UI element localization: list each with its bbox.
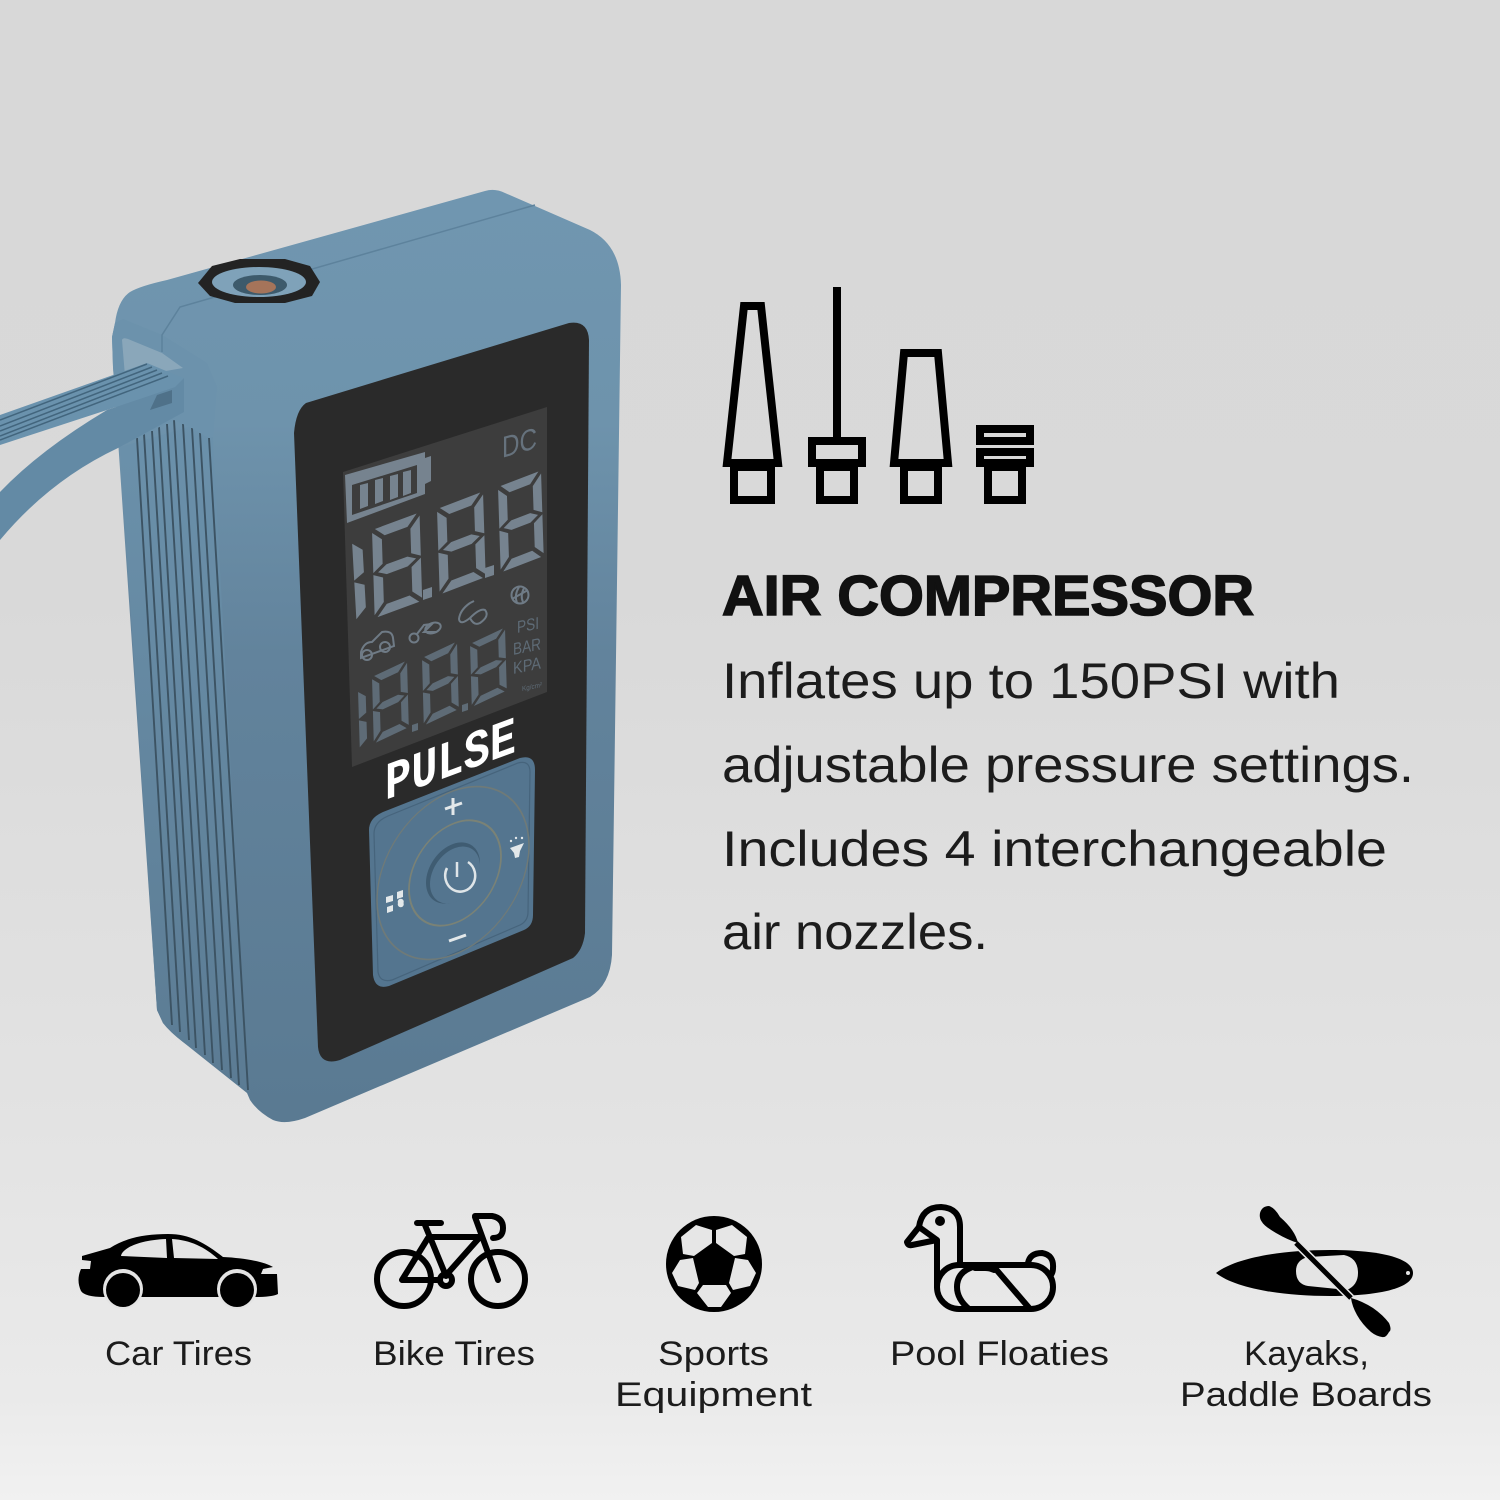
unit labels: Kg/cm² bbox=[522, 682, 543, 693]
ribbed side face bbox=[120, 420, 248, 1090]
icon: duck float bbox=[907, 1207, 1053, 1309]
label: Pool Floaties bbox=[890, 1335, 1109, 1373]
label: Sports bbox=[658, 1335, 769, 1373]
icon: soccer ball bbox=[666, 1216, 762, 1312]
use case: car tires bbox=[78, 1234, 278, 1373]
control pad bbox=[369, 757, 535, 987]
battery indicator bbox=[345, 452, 431, 523]
power button bbox=[426, 834, 480, 912]
seam lines bbox=[162, 205, 535, 352]
small digit readout bbox=[358, 628, 507, 747]
use case: sports equipment bbox=[615, 1216, 813, 1414]
unit labels bbox=[513, 613, 543, 693]
flashlight icon bbox=[510, 837, 524, 858]
mode icons bbox=[361, 586, 528, 660]
nozzle 3 bbox=[894, 353, 948, 500]
minus icon bbox=[449, 935, 466, 941]
nozzle 2: needle bbox=[812, 287, 862, 500]
unit labels: PSI bbox=[517, 613, 539, 637]
unit labels: BAR bbox=[513, 634, 541, 659]
LCD display bbox=[343, 407, 547, 767]
icon: bicycle bbox=[377, 1216, 525, 1306]
use case: kayaks and paddle boards bbox=[1180, 1206, 1432, 1414]
icon: car bbox=[78, 1234, 278, 1309]
strap slot and rim bbox=[112, 319, 217, 447]
description text: Includes 4 interchangeable bbox=[722, 821, 1387, 877]
plus icon bbox=[445, 798, 462, 815]
DC label: DC bbox=[502, 421, 537, 465]
PULSE logo: PULSE bbox=[385, 708, 516, 816]
product: air compressor device bbox=[0, 190, 621, 1122]
use case: bike tires bbox=[373, 1216, 535, 1373]
description text: Inflates up to 150PSI with bbox=[722, 653, 1340, 709]
description text bbox=[722, 653, 1414, 960]
mode dots icon bbox=[386, 890, 404, 913]
nozzle 4 bbox=[980, 429, 1030, 500]
nozzle 1 bbox=[727, 306, 778, 500]
heading: AIR COMPRESSOR bbox=[722, 564, 1254, 628]
icon: kayak and paddle bbox=[1216, 1206, 1413, 1337]
air outlet port bbox=[198, 259, 320, 303]
label line 2: Equipment bbox=[615, 1376, 813, 1414]
description text: air nozzles. bbox=[722, 904, 988, 960]
label: Bike Tires bbox=[373, 1335, 535, 1373]
label: Car Tires bbox=[105, 1335, 252, 1373]
use case: pool floaties bbox=[890, 1207, 1109, 1373]
description text: adjustable pressure settings. bbox=[722, 737, 1414, 793]
device body silhouette bbox=[112, 190, 621, 1122]
lower strap bbox=[0, 378, 184, 540]
icon: air nozzle set bbox=[727, 287, 1030, 500]
upper ribbed strap bbox=[0, 363, 183, 445]
label: Kayaks, bbox=[1244, 1335, 1369, 1373]
black front panel bbox=[294, 323, 589, 1061]
large digit readout bbox=[352, 470, 544, 619]
label line 2: Paddle Boards bbox=[1180, 1376, 1432, 1414]
unit labels: KPA bbox=[513, 652, 541, 678]
